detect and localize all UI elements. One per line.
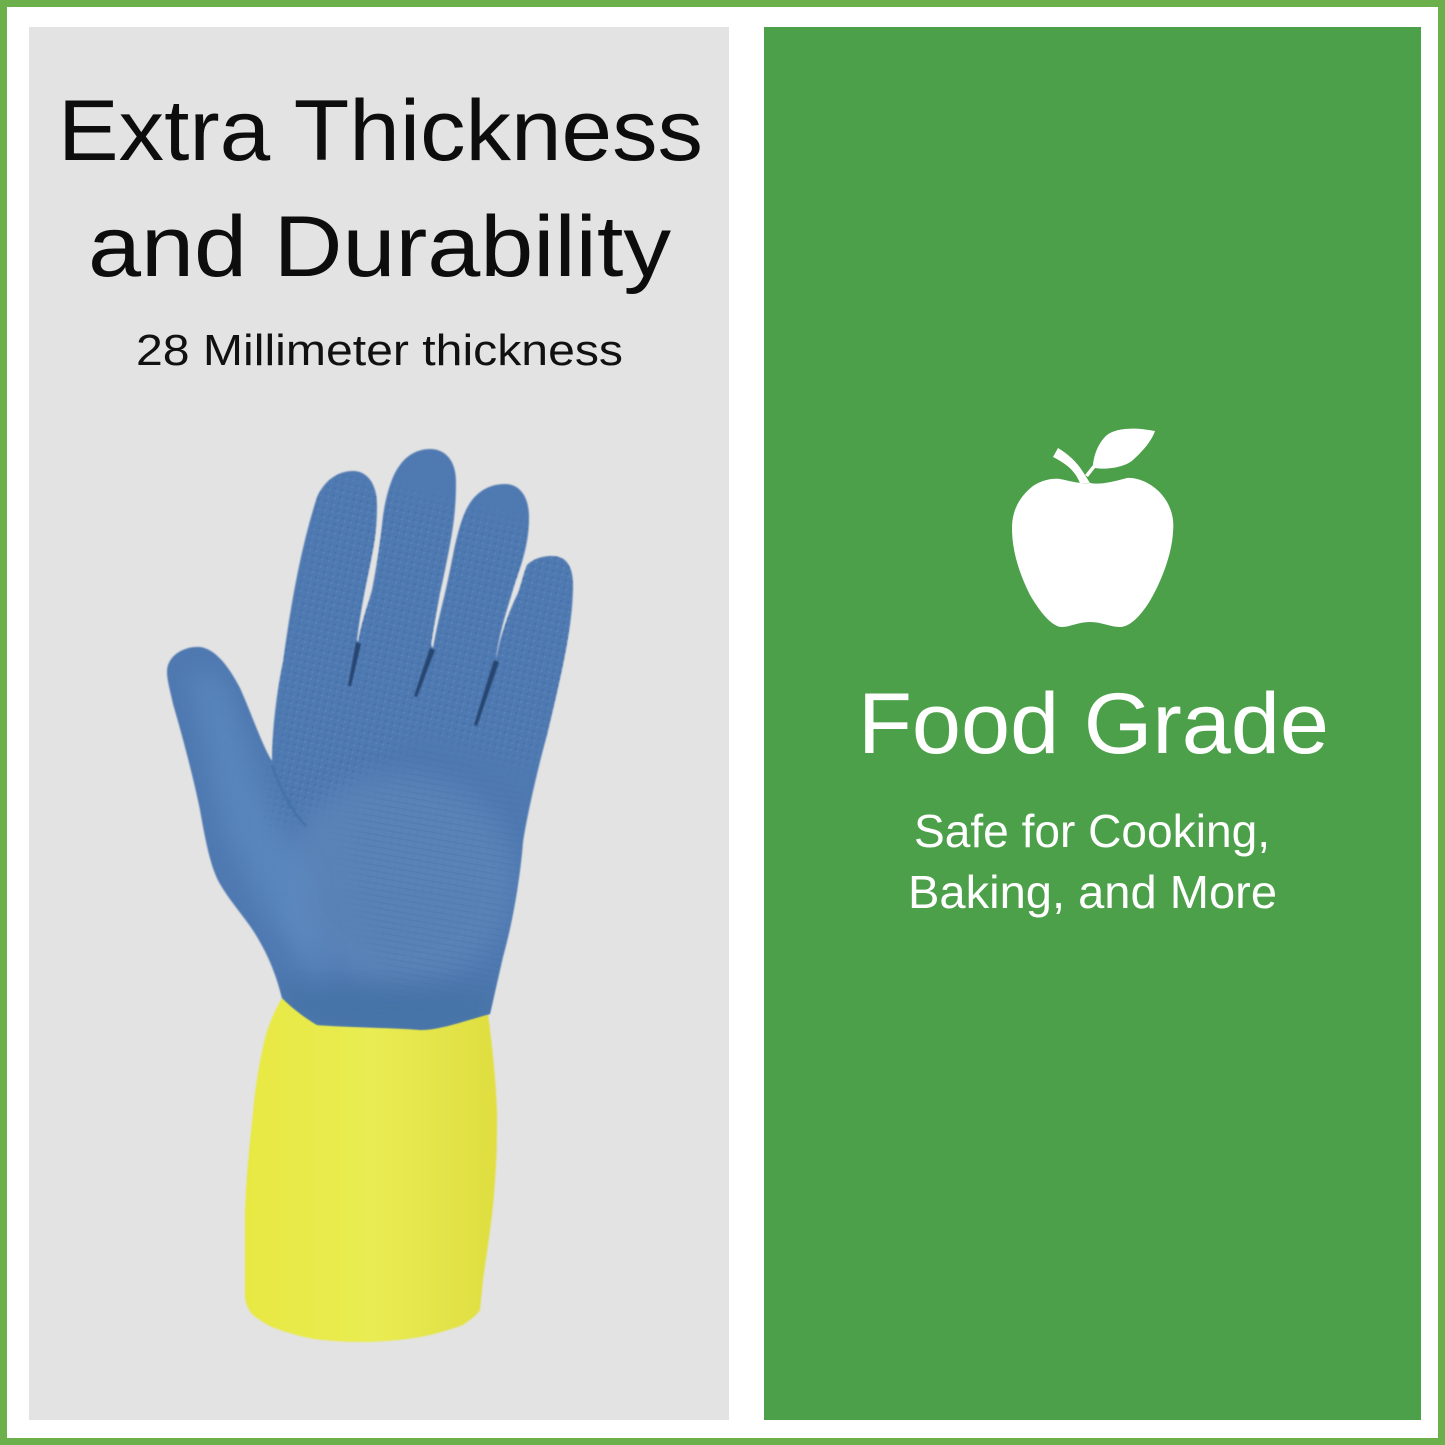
glove illustration	[167, 440, 580, 1342]
left panel background	[29, 27, 729, 1420]
finger creases	[348, 642, 499, 726]
subheading: thickness: 28 Millimeter thickness	[136, 326, 623, 375]
heading: extra thickness and durability: Extra Thickness	[58, 83, 703, 179]
icon: apple	[1012, 429, 1173, 627]
finger grip texture	[272, 471, 573, 811]
palm lighter shading	[302, 784, 520, 976]
right panel background	[764, 27, 1421, 1420]
description: safe for cooking: Safe for Cooking,	[914, 805, 1270, 857]
palm grip texture	[496, 937, 508, 984]
glove cuff	[245, 998, 497, 1342]
panel: extra thickness and durability	[29, 27, 729, 1420]
apple leaf	[1085, 429, 1155, 477]
apple stem	[1053, 448, 1090, 483]
thumb crease	[272, 765, 306, 826]
heading: extra thickness and durability	[58, 83, 703, 295]
thumb lighter shading	[202, 686, 306, 953]
description: safe for cooking	[908, 805, 1277, 918]
wrist band shading	[279, 986, 496, 1030]
glove blue palm and fingers	[167, 440, 580, 1034]
heading: extra thickness and durability: and Durability	[88, 199, 671, 295]
description: safe for cooking: Baking, and More	[908, 866, 1277, 918]
panel: food grade	[764, 27, 1421, 1420]
apple body	[1012, 478, 1173, 627]
heading: food grade: Food Grade	[858, 676, 1329, 772]
